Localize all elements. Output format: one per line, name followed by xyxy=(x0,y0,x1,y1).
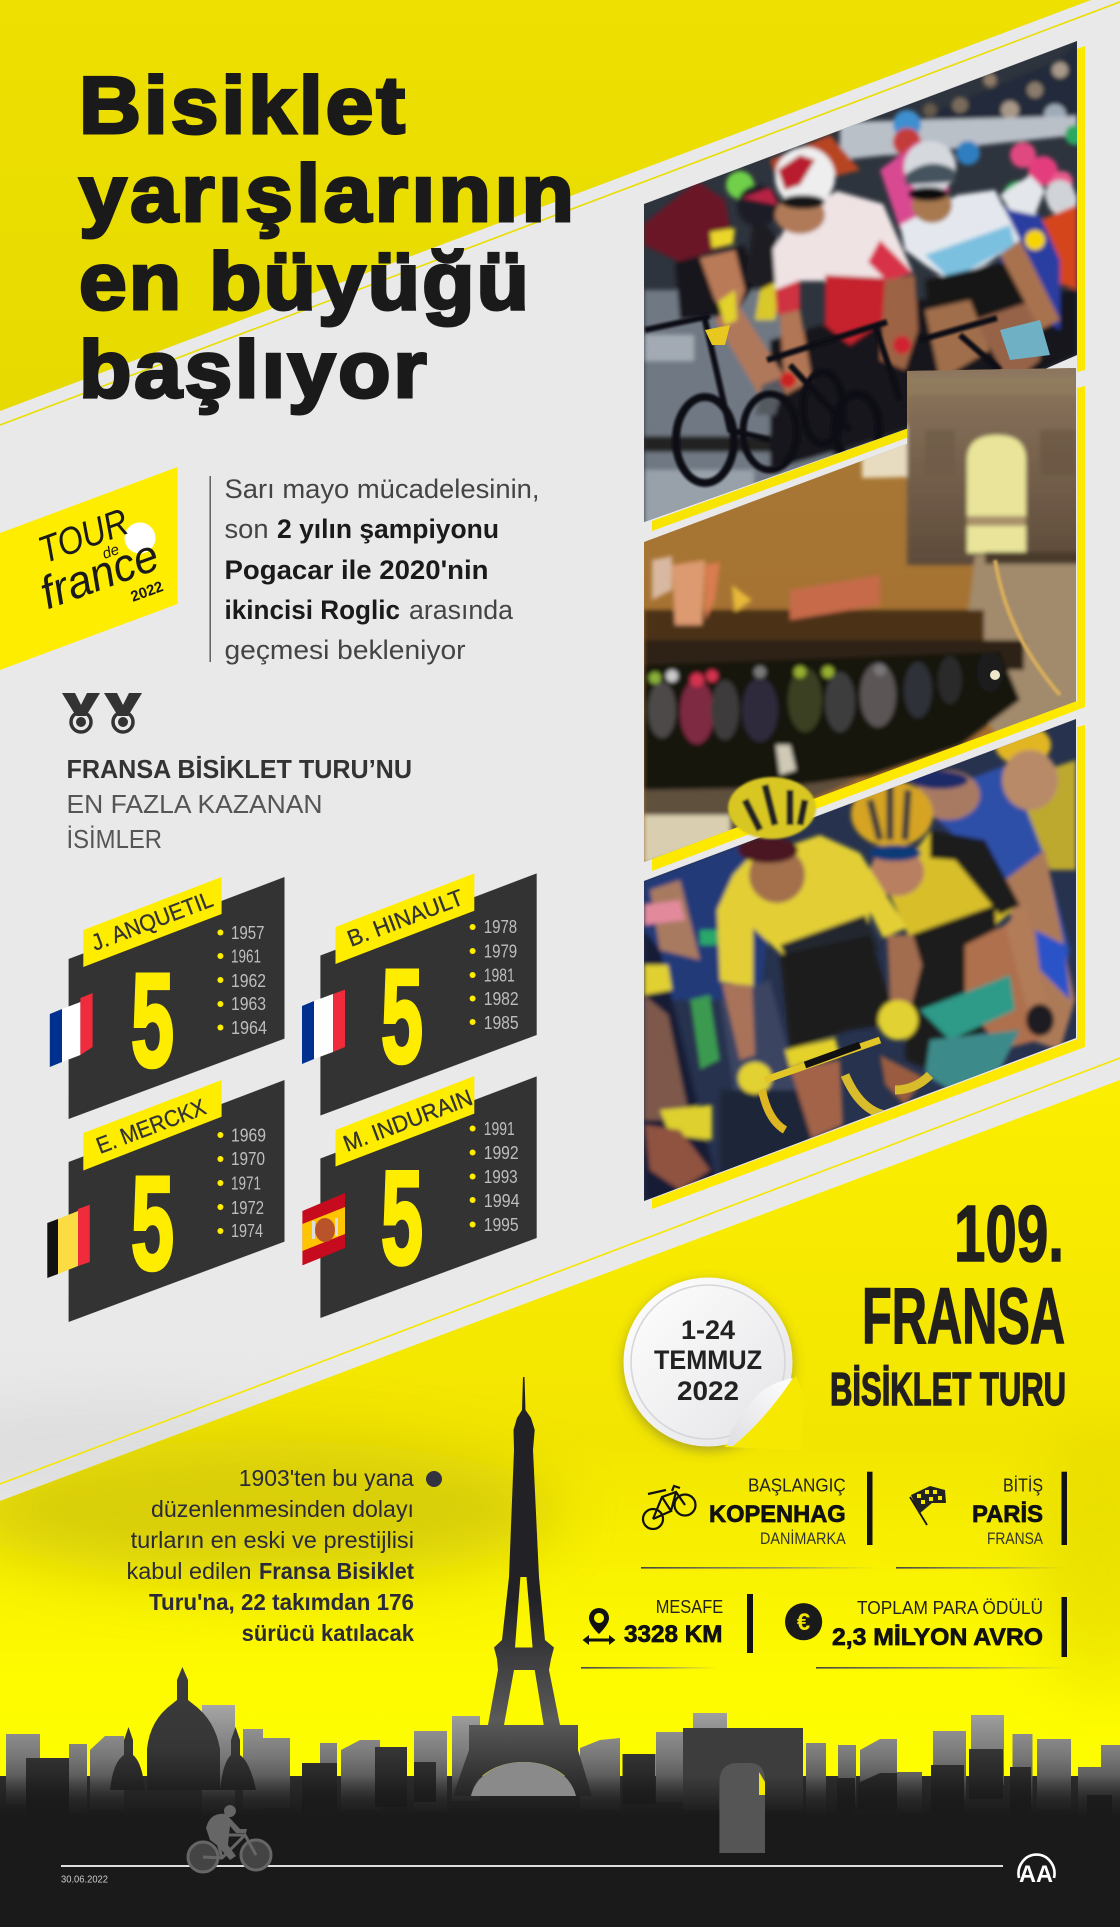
text: history note: düzenlenmesinden dolayı xyxy=(151,1496,414,1522)
card: M. Indurain: 1993 xyxy=(484,1167,518,1187)
logo: Tour de France 2022 xyxy=(0,467,178,670)
card: J. Anquetil: J. ANQUETIL xyxy=(88,886,217,956)
card: M. Indurain: 1992 xyxy=(484,1143,519,1163)
text: race heading: 109. xyxy=(954,1189,1064,1278)
background: top yellow band xyxy=(0,0,1091,411)
intro divider xyxy=(210,476,211,662)
start info: DANİMARKA xyxy=(760,1529,846,1548)
sticker: race dates: 1-24 xyxy=(681,1315,735,1345)
icon: location pin xyxy=(582,1608,616,1645)
bullet xyxy=(426,1471,442,1487)
icon: euro coin: € xyxy=(797,1609,810,1636)
ground fade xyxy=(0,1776,1120,1927)
icon: checkered flag xyxy=(910,1486,946,1525)
card: M. Indurain: 1994 xyxy=(484,1191,520,1211)
card: M. Indurain: M. INDURAIN xyxy=(340,1084,476,1157)
card: J. Anquetil: 5 xyxy=(131,947,174,1095)
accent: yellow side bar of photo 1 xyxy=(1077,46,1085,372)
title: başlıyor xyxy=(79,323,427,414)
end info xyxy=(972,1472,1067,1548)
title xyxy=(79,59,574,414)
card: B. Hinault: 1982 xyxy=(484,989,519,1009)
date: 30.06.2022 xyxy=(61,1875,108,1886)
card: E. Merckx xyxy=(47,1080,284,1322)
distance info: MESAFE xyxy=(656,1597,723,1617)
text: history note: kabul edilen xyxy=(126,1558,252,1584)
distance info xyxy=(624,1594,753,1653)
sticker: race dates: TEMMUZ xyxy=(654,1345,762,1375)
accent: yellow frame of photo 1 xyxy=(652,428,909,531)
card: B. Hinault: 1978 xyxy=(484,917,517,937)
text: history note: 1903'ten bu yana xyxy=(239,1465,414,1491)
photo: peloton close-up on Champs-Elysees xyxy=(640,40,1085,530)
card: E. Merckx: 1970 xyxy=(231,1149,265,1169)
text: history note: turların en eski ve prestijlisi xyxy=(131,1527,414,1553)
logo: Tour de France 2022: de xyxy=(100,541,122,563)
card: B. Hinault xyxy=(302,873,537,1116)
logo: Tour de France 2022: TOUR xyxy=(33,501,134,572)
card: M. Indurain xyxy=(302,1076,537,1318)
card: J. Anquetil: 1957 xyxy=(231,923,264,943)
heading: most wins: FRANSA BİSİKLET TURU’NU xyxy=(66,754,412,784)
card: M. Indurain: 1995 xyxy=(484,1215,519,1235)
intro text: geçmesi bekleniyor xyxy=(224,635,466,665)
text: history note xyxy=(126,1465,414,1646)
card: M. Indurain: 5 xyxy=(381,1144,423,1292)
prize info: 2,3 MİLYON AVRO xyxy=(832,1624,1043,1651)
sticker: race dates: 2022 xyxy=(677,1376,739,1406)
end info: FRANSA xyxy=(987,1529,1044,1548)
logo: Tour de France 2022: 2022 xyxy=(128,578,166,606)
accent: yellow frame of photo 2 xyxy=(652,698,1085,871)
skyline: domes and dark buildings xyxy=(26,1667,1112,1845)
end info: BİTİŞ xyxy=(1003,1476,1043,1496)
card: J. Anquetil xyxy=(50,877,284,1119)
intro text: Sarı mayo mücadelesinin, xyxy=(224,474,540,504)
prize info: TOPLAM PARA ÖDÜLÜ xyxy=(857,1598,1043,1618)
intro text xyxy=(224,474,540,665)
card: E. Merckx: 1969 xyxy=(231,1125,266,1145)
photo: yellow jersey rider xyxy=(640,700,1080,1210)
background: grey paper xyxy=(0,1410,224,1486)
skyline: back buildings xyxy=(6,1705,1120,1818)
card: E. Merckx: 1972 xyxy=(231,1198,264,1218)
photo: Arc de Triomphe and Champs-Elysees xyxy=(640,360,1085,870)
card: J. Anquetil: 1962 xyxy=(231,971,266,991)
card: M. Indurain: 1991 xyxy=(484,1119,515,1139)
icon: cyclist xyxy=(188,1805,271,1872)
card: B. Hinault: 1981 xyxy=(484,965,515,985)
background: bottom yellow band xyxy=(0,1080,1120,1776)
card: J. Anquetil: 1961 xyxy=(231,947,261,967)
skyline: Arc de Triomphe xyxy=(683,1728,803,1853)
intro text: Pogacar ile 2020'nin xyxy=(224,555,488,585)
title: en büyüğü xyxy=(79,235,529,326)
card: B. Hinault: 1979 xyxy=(484,942,517,962)
start info: BAŞLANGIÇ xyxy=(748,1476,846,1496)
icon: medals xyxy=(62,693,142,732)
heading: most wins: İSİMLER xyxy=(66,824,162,854)
intro text: son xyxy=(224,514,268,544)
end info: PARİS xyxy=(972,1501,1043,1528)
sticker: race dates xyxy=(624,1278,805,1450)
text: history note: sürücü katılacak xyxy=(242,1620,414,1646)
card: B. Hinault: B. HINAULT xyxy=(344,884,467,952)
title: yarışlarının xyxy=(79,147,574,238)
title: Bisiklet xyxy=(79,59,405,150)
card: J. Anquetil: 1964 xyxy=(231,1018,267,1038)
accent: yellow side bar of photo 2 xyxy=(1077,386,1085,703)
text: history note: Turu'na, 22 takımdan 176 xyxy=(149,1589,414,1615)
logo: AA: AA xyxy=(1019,1861,1053,1888)
logo: Tour de France 2022: france xyxy=(33,528,165,619)
start info: KOPENHAG xyxy=(709,1501,846,1528)
intro text: ikincisi Roglic xyxy=(224,595,400,625)
footer line xyxy=(61,1865,1003,1867)
card: B. Hinault: 5 xyxy=(381,943,423,1091)
distance info: 3328 KM xyxy=(624,1621,722,1648)
icon: euro coin xyxy=(785,1603,822,1640)
card: E. Merckx: 5 xyxy=(131,1150,174,1298)
card: B. Hinault: 1985 xyxy=(484,1013,519,1033)
text: race heading xyxy=(830,1189,1066,1415)
card: E. Merckx: E. MERCKX xyxy=(93,1094,209,1159)
ground behind skyline xyxy=(0,1776,1120,1927)
eiffel arch view xyxy=(471,1762,576,1796)
card: J. Anquetil: 1963 xyxy=(231,994,266,1014)
icon: helmet of yellow jersey rider overlapping the frame xyxy=(728,777,816,839)
card: E. Merckx: 1971 xyxy=(231,1174,261,1194)
intro text: 2 yılın şampiyonu xyxy=(277,514,499,544)
accent: yellow side bar of photo 3 xyxy=(652,725,1085,1209)
card: E. Merckx: 1974 xyxy=(231,1221,263,1241)
heading: most wins xyxy=(66,754,412,854)
heading: most wins: EN FAZLA KAZANAN xyxy=(66,789,322,819)
prize info xyxy=(832,1597,1067,1657)
skyline: Eiffel tower xyxy=(453,1377,592,1796)
text: history note: Fransa Bisiklet xyxy=(259,1558,414,1584)
start info xyxy=(709,1472,872,1548)
intro text: arasında xyxy=(409,595,513,625)
icon: bicycle xyxy=(643,1486,696,1529)
